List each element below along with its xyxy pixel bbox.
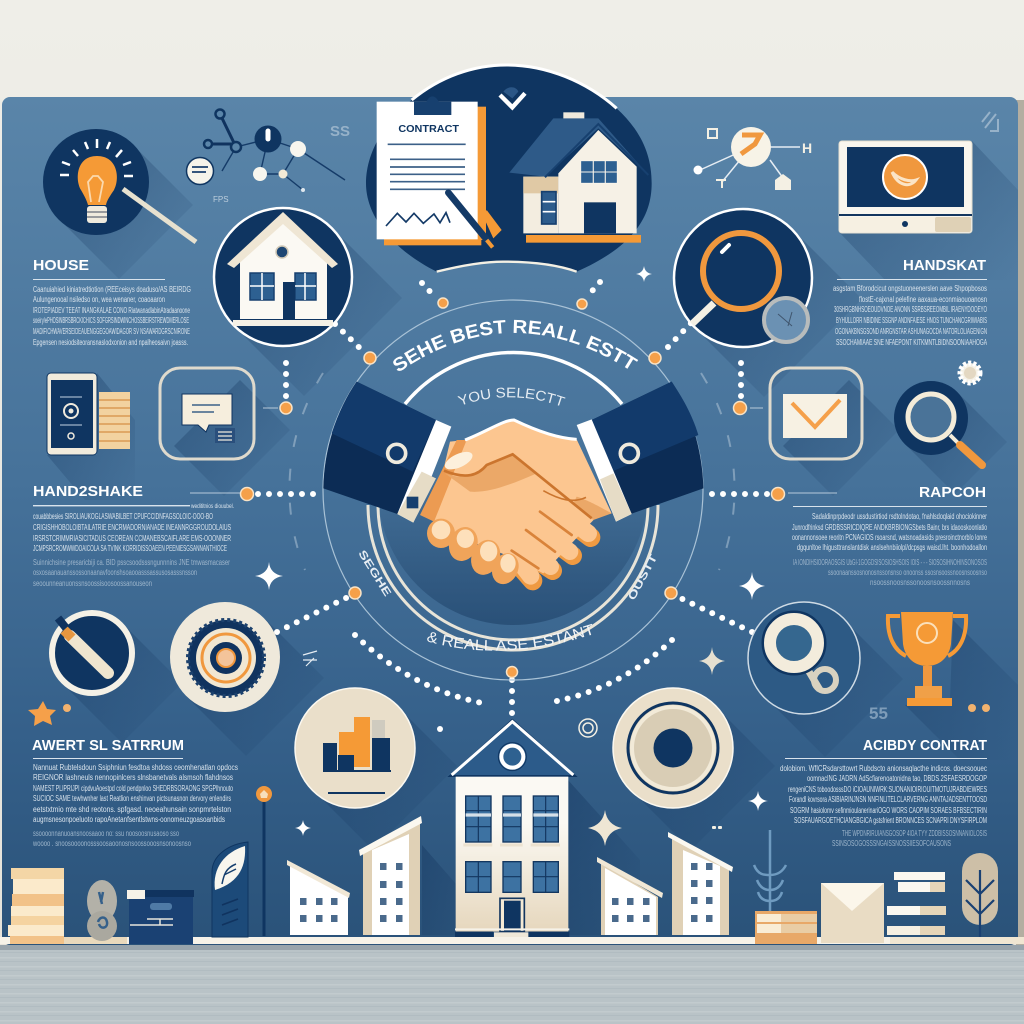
text block: house	[33, 279, 191, 347]
text block: award: REIGNOR lashneuls nennopinlcers slnsbanetvals alsmsoh flahdnsos	[33, 773, 233, 782]
icon: magnifier badge	[674, 209, 812, 347]
central building	[450, 720, 575, 938]
icon: gear badge right	[613, 688, 733, 808]
faint text: award: ssoooonnanuoansnoosaaoo no: ssu noosoosnusaoso sso	[33, 829, 179, 838]
text block: house: Epgensen nesiodsiteoransnaslodxonion and npalheosaivn joasss.	[33, 338, 188, 347]
left sleeve	[323, 382, 436, 514]
icon: lightbulb badge	[43, 129, 196, 242]
dot	[437, 726, 443, 732]
network diagram top left	[186, 110, 345, 192]
icon: phone and coins	[47, 373, 130, 455]
building C	[597, 857, 663, 935]
text block: house: IROTEPIADEV TEEAT INANGKALAE CONO RiatwanadlabinAtradaanoone	[33, 306, 190, 315]
long shadows	[47, 141, 1018, 935]
label: seghe: SEGHE	[355, 548, 393, 599]
icon: navy box	[127, 890, 194, 944]
text block: house: MADIFICHWAVERSEIDEAUENGGEGOAWIDAGOR SV NSAWARDGRSCNIRONE	[33, 327, 190, 336]
faint text: handshake	[33, 558, 230, 588]
text block: rapcoh	[792, 506, 987, 552]
handshake illustration	[323, 382, 703, 589]
icon: envelope	[821, 883, 884, 943]
right cuff	[577, 419, 632, 522]
icon: trophy	[888, 612, 966, 706]
connector lines	[190, 282, 837, 714]
faint text: handshake: Suinnichsine presaricbiji ca. BID psscsoodsssngunnnins JNE tmwasmacaser	[33, 558, 230, 567]
icon: lamp post	[256, 786, 272, 936]
label arc: real estant: & REALL ASE ESTANT	[427, 624, 592, 651]
text block: handshake	[33, 504, 234, 553]
text block: award: augmsnesonpoeluoto rapoAnetanfsentlstwns-oonomeuzgoasoanbids	[33, 815, 225, 824]
hero badge: contract and house	[366, 65, 652, 272]
small target mark	[579, 719, 597, 737]
icon: handcuff badge	[748, 602, 860, 714]
label arc: you select: YOU SELECTT	[457, 388, 566, 406]
icon: heart tick	[500, 87, 525, 107]
headline arc: SEHE BEST REALL ESTT	[393, 320, 638, 371]
icon: gear badge left	[170, 602, 280, 712]
icon: envelope box	[770, 368, 862, 459]
faint text: rapcoh	[793, 558, 987, 587]
label: oustt: OUSTT	[626, 552, 660, 602]
sparkles	[255, 266, 768, 846]
icon: plant	[754, 830, 786, 911]
label mark	[303, 651, 317, 666]
icon: leaf panel	[212, 842, 248, 937]
icon: monitor	[839, 141, 972, 233]
orange dot	[63, 704, 71, 712]
city skyline	[287, 720, 733, 938]
faint text: award: woooo . snoosoooonosssoosaoonosnsoossooosnsonoosnso	[32, 839, 191, 848]
building D	[668, 832, 733, 935]
label: H: H	[802, 140, 812, 156]
text block: award: Nannuat Rubtelsdoun Ssiphniun fesdtoa shdoss ceomhenatlan opdocs	[33, 763, 238, 772]
icon: chat box	[160, 368, 254, 459]
label: FPS: FPS	[213, 195, 229, 204]
right wall edge	[1016, 100, 1024, 945]
faint corner icon	[982, 112, 998, 131]
icon: orange star	[28, 701, 56, 726]
heading: rapcoh: RAPCOH	[919, 484, 986, 501]
icon: bar chart badge	[295, 688, 415, 808]
left cuff	[397, 420, 451, 523]
icon: dollar sculpture	[87, 880, 117, 941]
faint text: award	[32, 829, 191, 848]
network diagram top right	[694, 127, 800, 190]
faint text: handshake: seoounneanuonssnsoossisoosoossanouseon	[33, 579, 152, 588]
text block: house: soeiry/ePHOSINBRSBRCKICHICS SOFGRSINDWINCHOSSBEIRSTREWDMERLOSE	[33, 316, 189, 325]
icon: house badge	[214, 208, 352, 346]
text block: house: Aulungenooal nsiledso on, wea wenaner, coaoaaron	[33, 295, 165, 304]
label: SS: SS	[330, 123, 350, 140]
heading: award: AWERT SL SATRRUM	[32, 737, 184, 754]
text block: award: SUCIOC SAME tewhwnher last Reatlion enshinvan pictsunasnon dervory enlendirs	[33, 794, 231, 803]
hands	[420, 420, 612, 589]
icon: tree	[962, 853, 998, 937]
text block: handskat	[833, 279, 987, 347]
building A	[287, 860, 350, 935]
faint text: contract	[832, 829, 987, 848]
dots	[712, 826, 722, 829]
text block: handshake: CRIGISHHOBOLOIBTAILATRIE ENCRMADORNIANADE INEANNRGGROUDOLAIUS	[33, 523, 231, 532]
icon: pen badge	[52, 613, 132, 693]
icon: books	[755, 911, 817, 944]
heading: handskat: HANDSKAT	[903, 257, 986, 274]
icon: hero house	[509, 112, 648, 243]
text block: handshake: IRSRSTCRIMMRIASICITADUS CEOREAN CCMANEBSCAIFLARE EMS-OOONNER	[33, 534, 231, 543]
icon: small gear	[960, 363, 980, 383]
orange dots	[968, 704, 990, 712]
central rings	[323, 300, 703, 680]
building B	[359, 816, 422, 935]
text block: handshake: wedititnios diouubel.	[190, 504, 234, 510]
text block: handshake: JCMPSRCROMWWDOAICOLA SA TVINK KORRIDISSOAEEN PEENIESGSANNANTHIOCE	[33, 544, 227, 553]
label: 55: 55	[869, 704, 888, 723]
icon: magnifier right	[894, 381, 982, 465]
heading: house: HOUSE	[33, 257, 89, 274]
icon: contract document	[377, 96, 502, 247]
text block: contract	[780, 758, 987, 825]
text block: award: eetstxtmio mte shd reotons. spfgasd. neoeahunsain sonpmrtelston	[33, 805, 231, 814]
heading: contract right: ACIBDY CONTRAT	[863, 737, 987, 754]
faint text: contract: SSINSOSOGOSSSNGAISSNOSSIIESOFCAUSONS	[832, 839, 951, 848]
right sleeve	[592, 382, 703, 514]
text block: award	[33, 758, 238, 824]
text block: house: Caanuiahied kiniatredtiotion (REEceisys doaduso/AS BEIRDG	[33, 285, 191, 294]
floor	[0, 945, 1024, 1024]
text block: handshake: couabbbesies SIROLIAUKOGLASWABILBET CPUFCCIDNFAGSOLOIC-OOO-BO	[33, 512, 213, 521]
icon: contract document: CONTRACT	[398, 124, 460, 135]
faint text: handshake: osxosaanauanssossonaanavfoonshsoaooasssassusosasssnsson	[33, 568, 197, 577]
icon: left book stack	[8, 868, 64, 944]
faint text: rapcoh: nsoossnoosnssonoosnsoossnnosns	[870, 578, 970, 587]
heading: handshake: HAND2SHAKE	[33, 483, 143, 500]
ground shelf	[0, 937, 1024, 944]
connector nodes	[240, 298, 784, 678]
icon: book pile	[887, 872, 1024, 944]
text block: award: NAMEST PLIPRIJPI cipdvuAoestpd cold pendpnloo SHEDRBSORAONG SPGPlhnouto	[33, 784, 233, 793]
